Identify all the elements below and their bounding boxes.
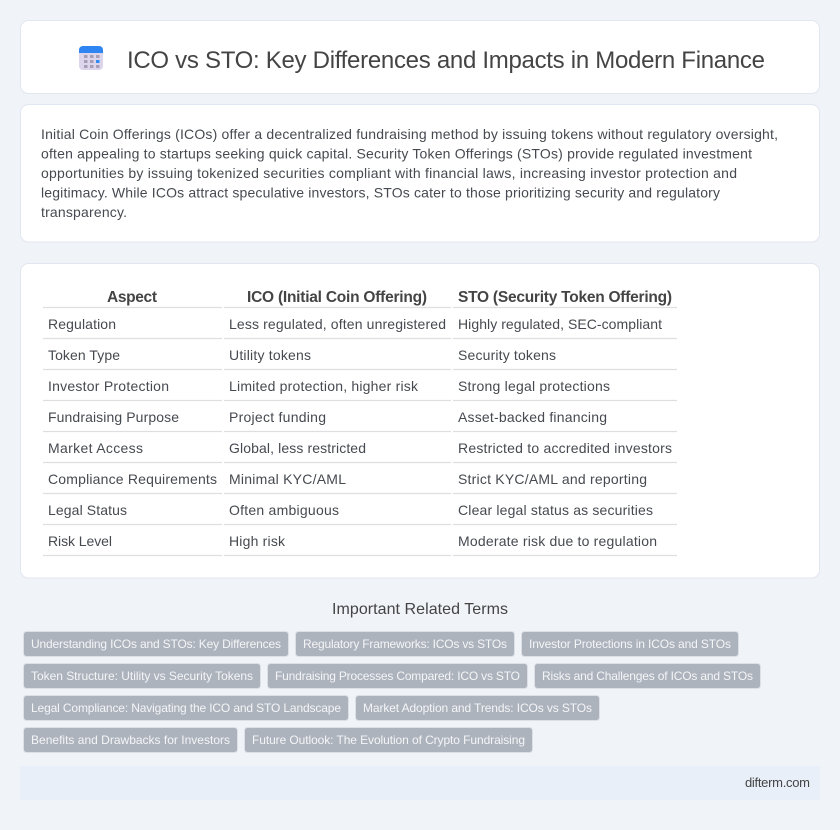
- tag: Investor Protections in ICOs and STOs: [529, 637, 731, 651]
- footer: difterm.com: [745, 775, 810, 790]
- table row: Risk Level: Moderate risk due to regulation: [458, 533, 657, 549]
- tag: [244, 728, 532, 752]
- tag: [296, 632, 514, 656]
- table row: Compliance Requirements: Compliance Requirements: [48, 471, 217, 487]
- table row: Investor Protection: [48, 378, 610, 394]
- table row: Regulation: Highly regulated, SEC-compliant: [458, 316, 662, 332]
- footer: [20, 766, 820, 800]
- table header: ICO (Initial Coin Offering): [247, 289, 427, 306]
- tag: Benefits and Drawbacks for Investors: [31, 733, 230, 747]
- table row: Market Access: Restricted to accredited investors: [458, 440, 672, 456]
- table header: STO (Security Token Offering): [458, 289, 672, 306]
- table row: Risk Level: Risk Level: [48, 533, 112, 549]
- tag: [24, 728, 238, 752]
- title: ICO vs STO: Key Differences and Impacts in Modern Finance: [127, 47, 765, 74]
- tag: [534, 664, 760, 688]
- icon: calendar: [79, 46, 103, 70]
- panel: comparison table: [20, 264, 820, 578]
- table row: Market Access: Global, less restricted: [229, 440, 366, 456]
- table row: Fundraising Purpose: Asset-backed financing: [458, 409, 607, 425]
- tag: [24, 664, 260, 688]
- table row: Risk Level: High risk: [229, 533, 286, 549]
- panel: header: [20, 20, 820, 94]
- tag: Risks and Challenges of ICOs and STOs: [542, 669, 753, 683]
- tag: [24, 632, 288, 656]
- table row: Token Type: Security tokens: [458, 347, 556, 363]
- tag: [268, 664, 528, 688]
- table row: Risk Level: [48, 533, 657, 549]
- table row: Market Access: [48, 440, 672, 456]
- table header: Aspect: [107, 289, 157, 306]
- text block: introduction paragraph: transparency.: [41, 204, 127, 220]
- tag: [356, 696, 600, 720]
- table row: Fundraising Purpose: [48, 409, 607, 425]
- text block: introduction paragraph: Initial Coin Offerings (ICOs) offer a decentralized fundraising method by issuing tokens without regulatory oversight,: [41, 126, 778, 142]
- text block: introduction paragraph: opportunities by issuing tokenized securities compliant with financial laws, increasing investor protection and: [41, 165, 737, 181]
- table header: [107, 289, 672, 306]
- tag: Fundraising Processes Compared: ICO vs STO: [275, 669, 520, 683]
- tags: related terms: [24, 632, 760, 752]
- table row: Token Type: [48, 347, 556, 363]
- tag: Understanding ICOs and STOs: Key Differences: [31, 637, 281, 651]
- tag: [522, 632, 738, 656]
- tag: Token Structure: Utility vs Security Tokens: [31, 669, 253, 683]
- table row: Regulation: Regulation: [48, 316, 116, 332]
- table row: Investor Protection: Strong legal protections: [458, 378, 610, 394]
- table row: Regulation: Less regulated, often unregistered: [229, 316, 446, 332]
- table row: Compliance Requirements: [48, 471, 647, 487]
- table row: Investor Protection: Limited protection, higher risk: [229, 378, 419, 394]
- table row: Market Access: Market Access: [48, 440, 143, 456]
- tag: Legal Compliance: Navigating the ICO and STO Landscape: [31, 701, 341, 715]
- panel: introduction: [20, 104, 820, 242]
- tag: Future Outlook: The Evolution of Crypto Fundraising: [252, 733, 525, 747]
- table row: Legal Status: Clear legal status as securities: [458, 502, 653, 518]
- table row: Fundraising Purpose: Project funding: [229, 409, 326, 425]
- table row: Investor Protection: Investor Protection: [48, 378, 169, 394]
- table row: Compliance Requirements: Minimal KYC/AML: [229, 471, 346, 487]
- table row: Legal Status: Legal Status: [48, 502, 127, 518]
- heading: related terms: Important Related Terms: [332, 601, 508, 618]
- table row: Compliance Requirements: Strict KYC/AML and reporting: [458, 471, 647, 487]
- table row: Legal Status: [48, 502, 653, 518]
- tag: [24, 696, 348, 720]
- table row: Legal Status: Often ambiguous: [229, 502, 339, 518]
- text block: introduction paragraph: [41, 126, 778, 220]
- table row: Token Type: Token Type: [48, 347, 120, 363]
- table row: Regulation: [48, 316, 662, 332]
- table row: Fundraising Purpose: Fundraising Purpose: [48, 409, 179, 425]
- tag: Market Adoption and Trends: ICOs vs STOs: [363, 701, 592, 715]
- text block: introduction paragraph: often appealing to startups seeking quick capital. Security Token Offerings (STOs) provide regulated investment: [41, 146, 752, 162]
- table row: Token Type: Utility tokens: [229, 347, 311, 363]
- tag: Regulatory Frameworks: ICOs vs STOs: [303, 637, 507, 651]
- text block: introduction paragraph: legitimacy. While ICOs attract speculative investors, STOs cater to those prioritizing security and regulatory: [41, 184, 720, 200]
